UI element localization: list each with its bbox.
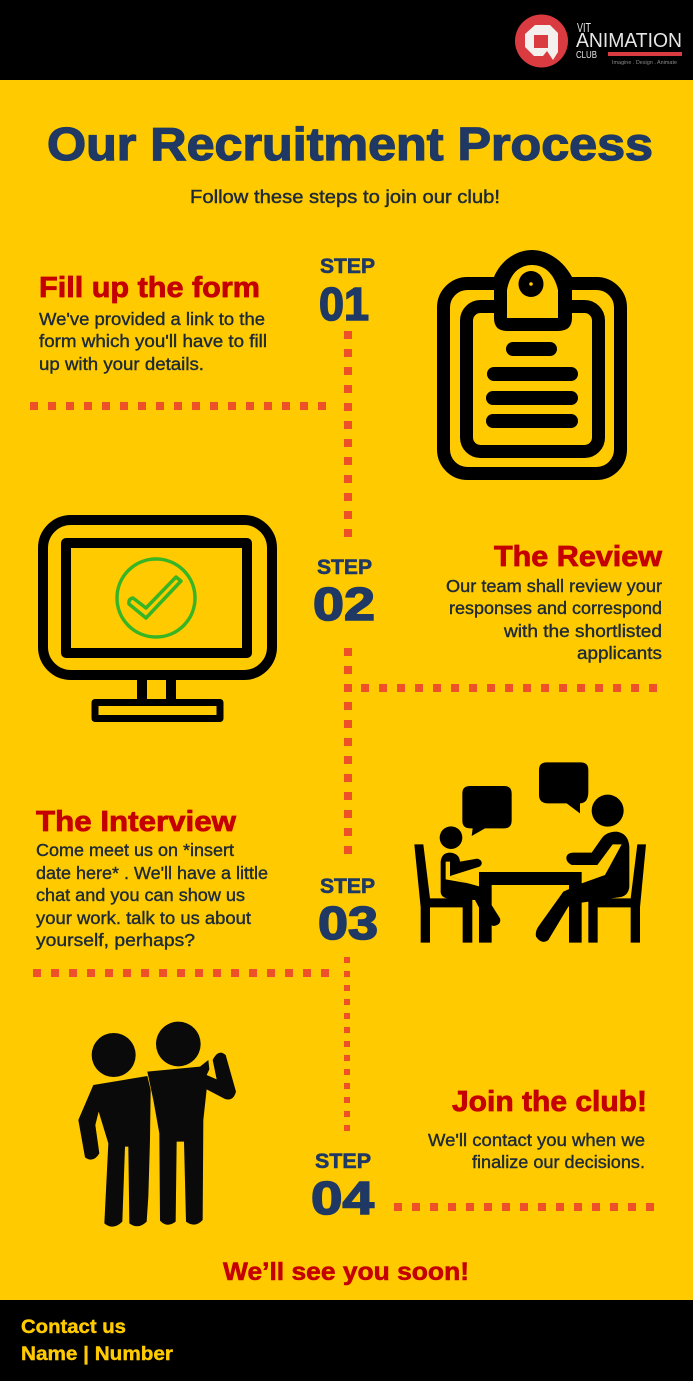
step 2 text [446, 541, 662, 663]
contact text [21, 1317, 174, 1365]
chairs [414, 844, 472, 943]
step 4 text: finalize our decisions. [472, 1152, 645, 1172]
heads [440, 826, 462, 849]
logo: CLUB [576, 50, 597, 61]
step 4 text [428, 1086, 647, 1172]
step 3 text: date here* . We'll have a little [36, 863, 268, 883]
step 3 label: 03 [318, 897, 378, 949]
step 1 label: 01 [319, 278, 369, 330]
step 4 label [311, 1150, 375, 1224]
icon: two friends [78, 1022, 236, 1227]
icon: monitor with check [43, 520, 272, 718]
step 2 text: The Review [494, 541, 662, 573]
step 3 text: chat and you can show us [36, 885, 245, 905]
check circle [117, 559, 195, 637]
step 3 label: STEP [320, 875, 375, 898]
title: Our Recruitment Process [47, 118, 653, 170]
step 2 text: with the shortlisted [503, 621, 662, 641]
icon: clipboard [444, 250, 620, 474]
subtitle: Follow these steps to join our club! [190, 186, 500, 207]
step 1 label [319, 255, 375, 330]
step 4 label: 04 [311, 1172, 375, 1224]
step 3 text [36, 806, 268, 950]
step 4 text: Join the club! [452, 1086, 647, 1118]
large figure [536, 832, 629, 942]
step 1 text [39, 272, 267, 374]
closing message: We’ll see you soon! [223, 1258, 469, 1286]
small figure [441, 853, 500, 926]
logo [515, 14, 682, 68]
step 3 label [318, 875, 378, 949]
step 3 text: yourself, perhaps? [36, 930, 195, 950]
step 1 text: Fill up the form [39, 272, 260, 304]
step 1 text: We've provided a link to the [39, 309, 265, 329]
step 2 label: 02 [313, 578, 375, 630]
step 1 label: STEP [320, 255, 375, 278]
step 3 text: Come meet us on *insert [36, 840, 234, 860]
step 2 label: STEP [317, 556, 372, 579]
step 4 text: We'll contact you when we [428, 1130, 645, 1150]
step 2 label [313, 556, 375, 630]
step 3 text: The Interview [36, 806, 236, 838]
contact text: Contact us [21, 1317, 126, 1338]
speech bubbles [462, 786, 512, 836]
logo: ANIMATION [576, 30, 682, 52]
step 4 label: STEP [315, 1150, 371, 1173]
header bar [0, 0, 693, 80]
footer bar [0, 1300, 693, 1381]
step 1 text: form which you'll have to fill [39, 331, 267, 351]
step 3 text: your work. talk to us about [36, 908, 251, 928]
table [479, 872, 582, 943]
dotted connectors [30, 331, 660, 1207]
icon: interview at table [414, 762, 646, 943]
contact text: Name | Number [21, 1344, 174, 1365]
logo: VIT [577, 21, 591, 35]
step 1 text: up with your details. [39, 354, 204, 374]
step 2 text: responses and correspond [449, 598, 662, 618]
step 2 text: applicants [577, 643, 662, 663]
step 2 text: Our team shall review your [446, 576, 662, 596]
logo: Imagine . Design . Animate [612, 60, 677, 66]
